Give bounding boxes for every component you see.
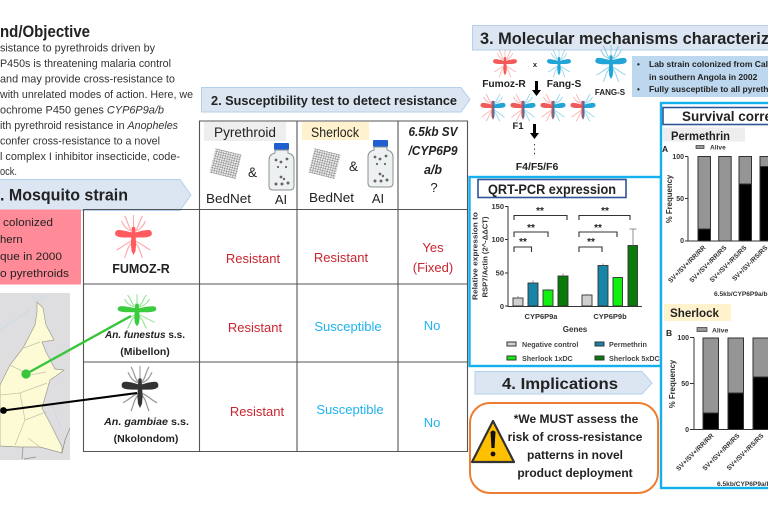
stacked bar chart B: Sherlock: Alive (712, 328, 728, 334)
row: An. gambiae: Susceptible (316, 402, 384, 417)
text block: background: l complex I inhibitor insecticide, code- (0, 151, 180, 163)
callout: implications: risk of cross-resistance (508, 430, 643, 444)
row: An. gambiae (103, 366, 440, 445)
panel: QRT-PCR expression (470, 177, 661, 366)
bar chart: gene expression: Genes (563, 325, 588, 334)
stacked bar chart A: permethrin: 50 (676, 196, 684, 203)
callout: implications: *We MUST assess the (514, 412, 639, 426)
row: FUMOZ-R: Resistant (226, 251, 280, 266)
callout: implications: product deployment (517, 466, 633, 480)
section arrow 2: susceptibility test: 2. Susceptibility test to detect resistance (211, 93, 457, 108)
text block: background: sistance to pyrethroids driven by (0, 42, 155, 54)
map of Cameroon (0, 293, 70, 460)
stacked bar chart B: Sherlock: SV+/SV+/RR/RS (701, 432, 742, 472)
text block: background (0, 42, 193, 178)
row: An. gambiae: Resistant (230, 404, 284, 419)
crossing diagram: x (533, 60, 538, 69)
section arrow 4: implications (475, 372, 652, 394)
row: An. gambiae: An. gambiae s.s. (103, 417, 189, 428)
stacked bar chart B: Sherlock: 50 (681, 381, 689, 388)
header: Sherlock test: BedNet (309, 190, 354, 205)
crossing diagram (481, 45, 627, 173)
text block: background: ochrome P450 genes CYP6P9a/b (0, 104, 164, 116)
bar chart: gene expression: ** (527, 223, 535, 234)
stacked bar chart B: Sherlock: 0 (685, 427, 689, 434)
header: pyrethroid test (204, 122, 294, 207)
header: structural variant: ? (430, 180, 438, 195)
table with strain results (84, 120, 468, 452)
stacked bar chart B: Sherlock: SV+/SV+/RS/RS (726, 432, 766, 472)
section arrow 1: mosquito strain: . Mosquito strain (0, 186, 128, 204)
stacked bar chart B: Sherlock: % Frequency (668, 359, 677, 408)
stacked bar chart A: permethrin: 100 (672, 154, 684, 161)
legend: Permethrin (609, 340, 647, 349)
stacked bar chart A: permethrin: % Frequency (665, 174, 674, 223)
text block: background: confer cross-resistance to a novel (0, 136, 160, 148)
callout: strain description: hern (0, 234, 23, 246)
icon: warning triangle (472, 421, 514, 462)
stacked bar chart B: Sherlock: 100 (677, 335, 689, 342)
text block: background: ith pyrethroid resistance in Anopheles (0, 120, 178, 132)
text block: background: ock. (0, 166, 17, 178)
section arrow 1: mosquito strain (0, 180, 191, 210)
stacked bar chart B: Sherlock: B (666, 328, 672, 338)
bar chart: gene expression: ** (519, 237, 527, 248)
bar chart: gene expression: 0 (500, 302, 504, 311)
bar chart: gene expression: CYP6P9a (525, 312, 558, 321)
row: FUMOZ-R (112, 215, 453, 276)
header: structural variant (408, 125, 459, 195)
header: pyrethroid test: AI (275, 192, 287, 207)
stacked bar chart A: permethrin (662, 144, 768, 298)
callout: strain description: o pyrethroids (0, 268, 69, 280)
bar chart: gene expression: 150 (491, 202, 504, 211)
header: pyrethroid test: & (248, 165, 257, 180)
crossing diagram: F1 (512, 121, 524, 132)
bar chart: gene expression: 50 (496, 268, 504, 278)
text block: background: and may provide cross-resistance to (0, 74, 175, 86)
header: Sherlock test: AI (372, 191, 384, 206)
callout: implications (470, 403, 658, 493)
legend: Sherlock 1xDC (522, 354, 573, 363)
tag: Permethrin (663, 128, 745, 143)
info box: FANG-S strain: • (637, 60, 640, 69)
bar chart: gene expression: CYP6P9b (593, 312, 627, 321)
row: An. funestus: (Mibellon) (120, 346, 170, 358)
panel: survival correlation (661, 103, 768, 488)
tag: Sherlock (664, 304, 731, 321)
row: FUMOZ-R: (Fixed) (413, 260, 453, 275)
row: FUMOZ-R: Yes (422, 240, 444, 255)
stacked bar chart A: permethrin: SV+/SV+/RR/RR (667, 244, 708, 285)
row: FUMOZ-R: FUMOZ-R (112, 262, 170, 276)
section arrow 4: implications: 4. Implications (502, 376, 618, 393)
row: FUMOZ-R: Resistant (314, 250, 368, 265)
callout: strain description: que in 2000 (0, 251, 62, 263)
bar chart: gene expression (472, 202, 660, 363)
header: pyrethroid test: BedNet (206, 191, 251, 206)
arrow: F1 to F4-F6 (530, 124, 539, 139)
bar chart: gene expression: ** (601, 206, 609, 217)
header: structural variant: 6.5kb SV (408, 125, 459, 139)
legend (507, 340, 660, 363)
title: QRT-PCR: QRT-PCR expression (488, 182, 616, 197)
row: An. funestus: Susceptible (314, 319, 382, 334)
stacked bar chart A: permethrin: Alive (710, 144, 726, 152)
bar chart: gene expression: RSP7/Actin (2^-ΔΔCT) (482, 216, 490, 298)
stacked bar chart A: permethrin: SV+/SV+/RS/RS (709, 244, 749, 284)
bar chart: gene expression: ** (536, 206, 544, 217)
header: structural variant: a/b (424, 163, 442, 177)
bar chart: gene expression: Relative expression to (472, 212, 480, 300)
tag: Sherlock: Sherlock (670, 308, 720, 320)
legend: Negative control (522, 340, 578, 349)
tag: Permethrin: Permethrin (671, 131, 730, 143)
header: structural variant: /CYP6P9 (408, 144, 458, 158)
text block: background: with unrelated modes of action. Here, we (0, 89, 193, 101)
callout: strain description (0, 210, 81, 284)
heading: background and objective: nd/Objective (0, 23, 90, 41)
row: An. funestus: No (424, 318, 440, 333)
crossing diagram: Fumoz-R (482, 79, 526, 90)
arrow: cross to F1 (532, 81, 541, 96)
callout: implications: patterns in novel (527, 448, 623, 462)
header: Sherlock test: Sherlock (311, 125, 359, 140)
header: Sherlock test: & (349, 159, 358, 174)
row: An. gambiae: No (424, 415, 440, 430)
text block: background: P450s is threatening malaria control (0, 58, 171, 70)
crossing diagram: F4/F5/F6 (516, 161, 558, 173)
stacked bar chart A: permethrin: SV+/SV+/RR/RS (688, 244, 729, 284)
row: An. funestus: An. funestus s.s. (104, 330, 185, 341)
row: An. funestus: Resistant (228, 320, 282, 335)
info box: FANG-S strain: in southern Angola in 2002 (649, 72, 758, 82)
crossing diagram: Fang-S (547, 79, 581, 90)
header: pyrethroid test: Pyrethroid (214, 125, 276, 140)
stacked bar chart A: permethrin: 0 (680, 238, 684, 245)
row: An. gambiae: (Nkolondom) (114, 433, 178, 445)
callout: strain description: colonized (3, 217, 53, 229)
legend: Sherlock 5xDC (609, 354, 660, 363)
section arrow 2: susceptibility test (202, 88, 470, 112)
section arrow 3: molecular mechanisms: 3. Molecular mechanisms characteriz (480, 30, 768, 48)
stacked bar chart A: permethrin: 6.5kb/CYP6P9a/b (714, 291, 768, 298)
stacked bar chart B: Sherlock (666, 328, 768, 488)
info box: FANG-S strain: • (637, 85, 640, 94)
bar chart: gene expression: 100 (491, 235, 504, 244)
bar chart: gene expression: ** (594, 223, 602, 234)
map marker line: Mibellon (21, 316, 131, 379)
stacked bar chart A: permethrin: A (662, 144, 668, 154)
header: Sherlock test (302, 122, 393, 206)
crossing diagram: FANG-S (595, 88, 626, 97)
row: An. funestus (104, 294, 440, 358)
info box: FANG-S strain (632, 56, 768, 97)
bar chart: gene expression: ** (587, 237, 595, 248)
stacked bar chart B: Sherlock: SV+/SV+/RR/RR (675, 432, 716, 473)
map marker line: Nkolondom (0, 393, 137, 414)
